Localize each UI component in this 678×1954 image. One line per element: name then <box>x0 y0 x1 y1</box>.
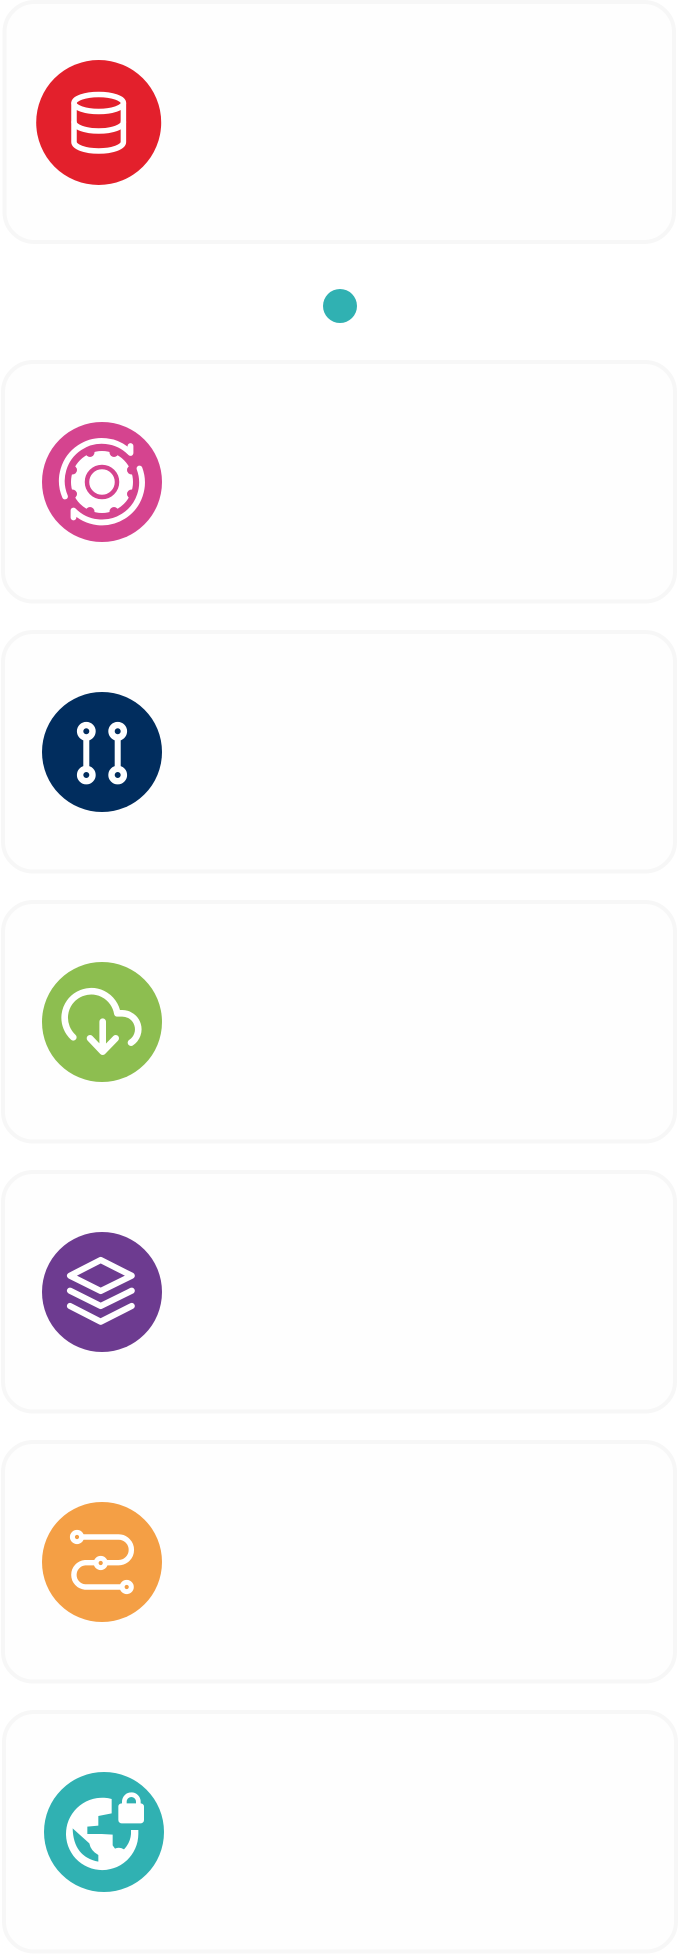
panel: card 4 <box>3 902 675 1142</box>
icon: winding path with nodes <box>42 1502 162 1622</box>
icon: database <box>36 60 161 185</box>
panel: card 7 <box>4 1712 676 1952</box>
panel: card 6 <box>3 1442 675 1682</box>
panel: card 2 <box>3 362 675 602</box>
icon: gear with rotating arrows <box>42 422 162 542</box>
icon: paired connectors <box>42 692 162 812</box>
panel: card 3 <box>3 632 675 872</box>
icon: cloud download <box>42 962 162 1082</box>
panel: card 5 <box>3 1172 675 1412</box>
panel: card 1 <box>4 2 674 242</box>
connector dot <box>323 289 357 323</box>
icon: stacked layers <box>42 1232 162 1352</box>
icon: globe with padlock <box>44 1772 164 1892</box>
